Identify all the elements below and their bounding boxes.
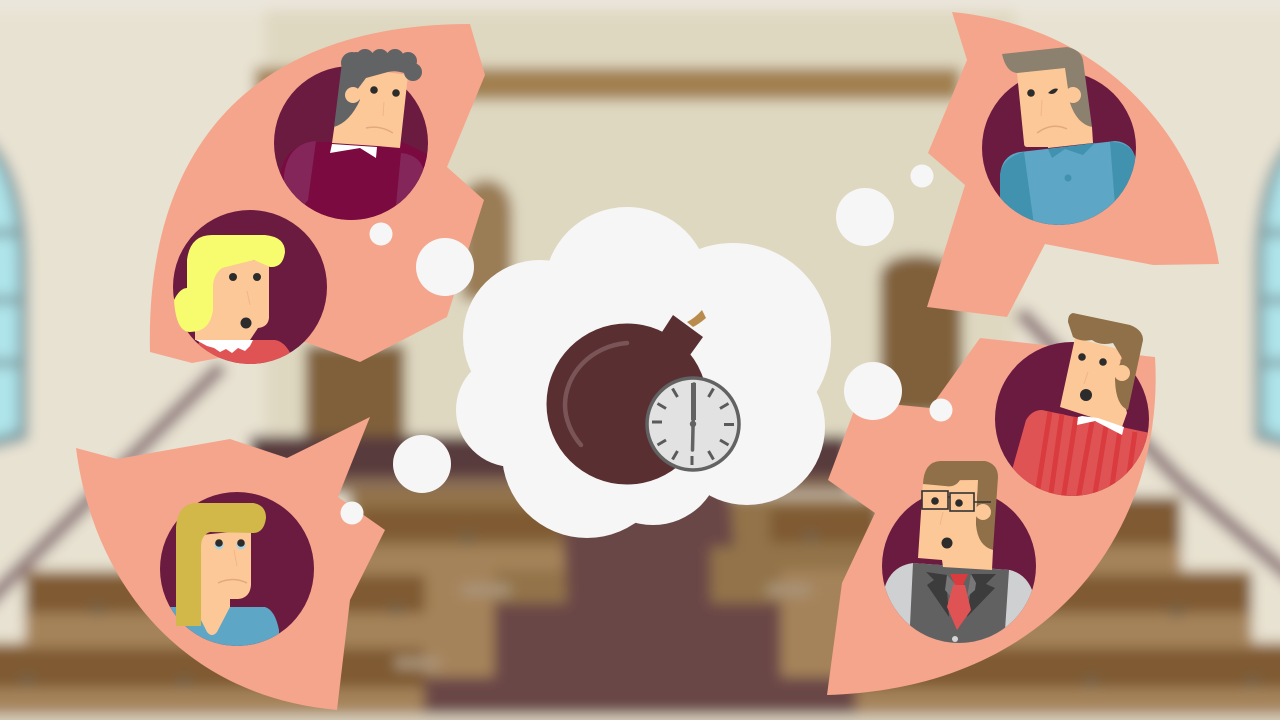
character: angry man in blue shirt [982,47,1136,240]
thought bubbles [340,164,952,524]
panel: top-right thought shape [927,12,1219,317]
panel: bottom-right thought shape [827,338,1156,695]
icon: bomb with clock [546,310,739,484]
character: surprised man in red sweater [995,313,1150,500]
central thought cloud [456,207,831,538]
character: man with glasses in suit [882,461,1036,650]
character: blonde woman [173,210,327,365]
character: grey-haired juror [274,49,428,220]
panel: top-left thought shape [150,24,485,363]
character: mustard-haired woman [160,492,314,660]
panel: bottom-left thought shape [76,417,385,710]
